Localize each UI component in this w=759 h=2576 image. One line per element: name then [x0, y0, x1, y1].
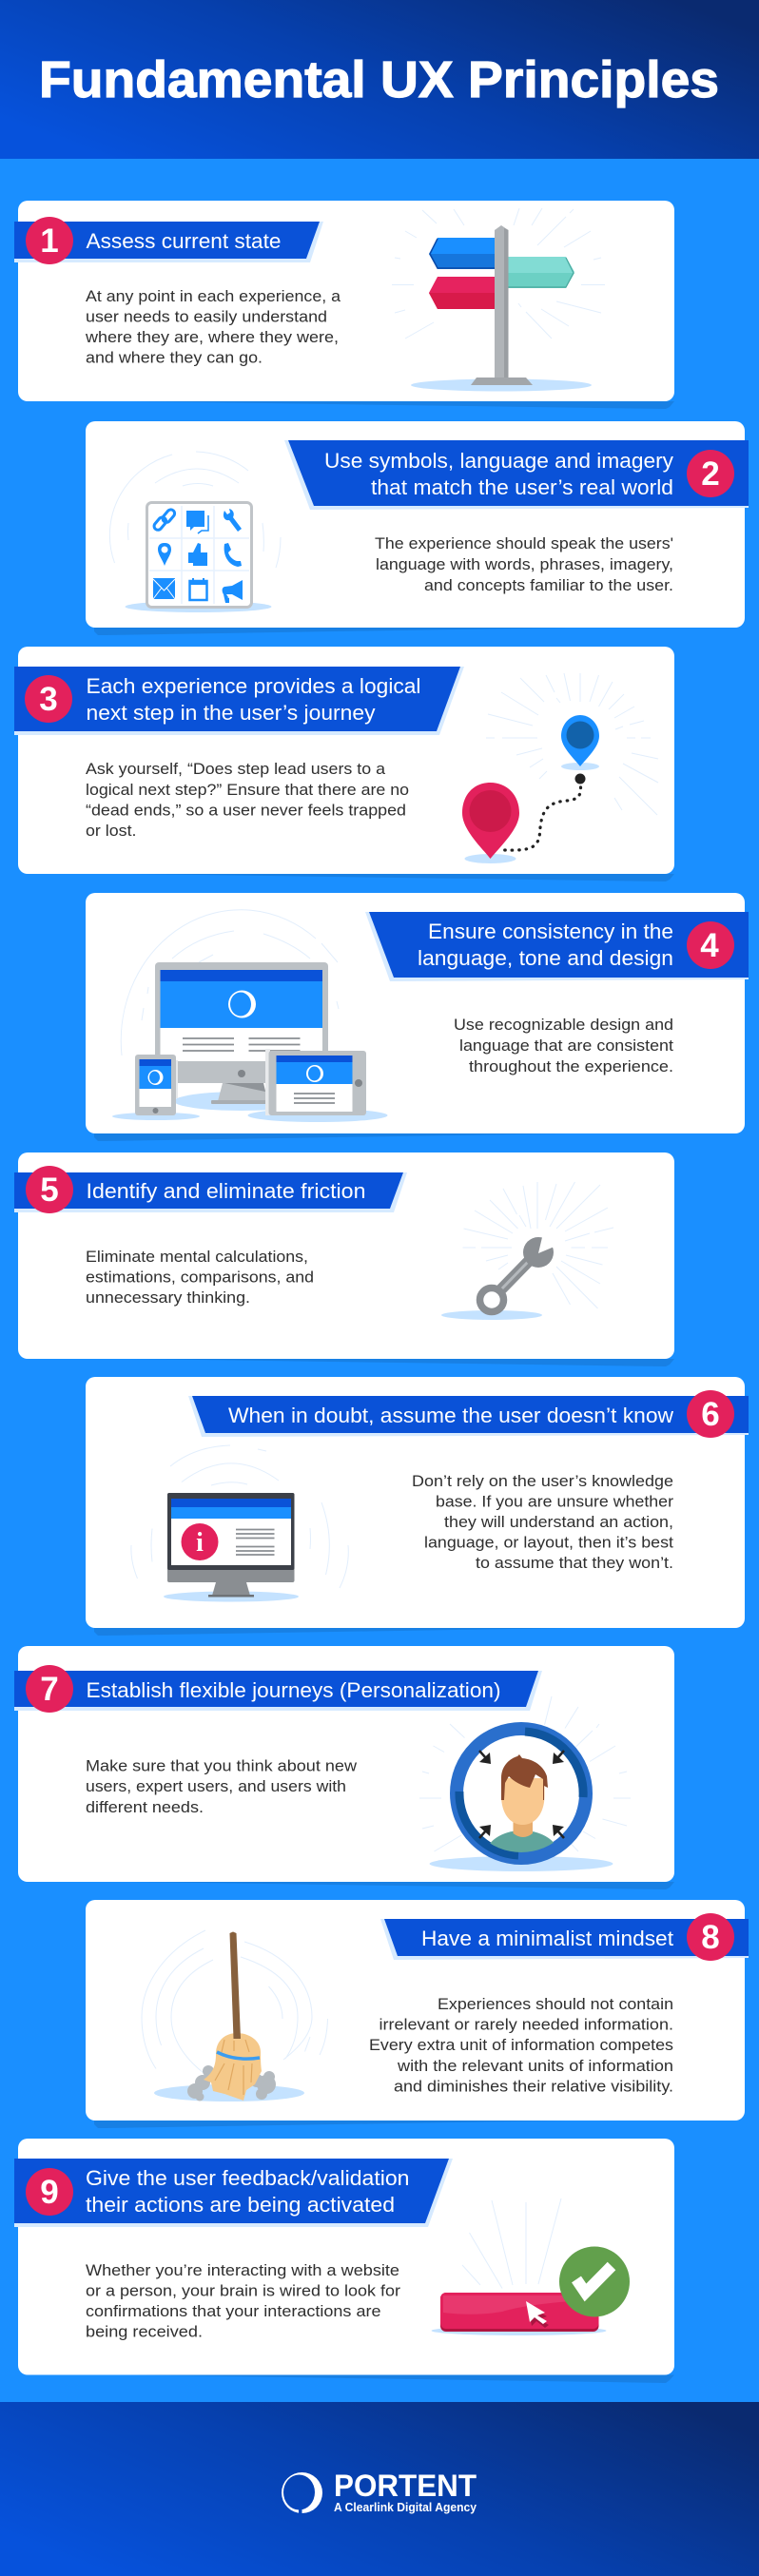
heading: feedback and validation: their actions are being activated	[86, 2193, 395, 2217]
icon: map pin	[158, 543, 171, 566]
number badge 4	[687, 921, 734, 969]
number badge 2: 2	[701, 455, 720, 493]
text: flexible journeys body: Make sure that you think about new	[86, 1757, 357, 1774]
text: feedback body: or a person, your brain is wired to look for	[86, 2282, 401, 2299]
text: assume the user body: to assume that they won’t.	[476, 1555, 673, 1572]
icon: personalized user	[419, 1696, 631, 1882]
text: flexible journeys body	[86, 1757, 357, 1816]
icon: megaphone	[223, 580, 243, 603]
number badge 9	[26, 2168, 73, 2216]
text: minimalist body: Experiences should not contain	[438, 1996, 673, 2013]
banner: step 7	[14, 1665, 542, 1713]
text: consistency body: Use recognizable design and	[454, 1017, 673, 1034]
text: logical next step body: Ask yourself, “Does step lead users to a	[86, 761, 386, 778]
green check badge	[559, 2246, 630, 2316]
heading: logical next step: Each experience provides a logical	[86, 674, 420, 698]
logo: Portent	[282, 2469, 477, 2515]
panel: 3 logical next step	[14, 647, 674, 881]
text: assess current state body: At any point in each experience, a	[86, 288, 341, 305]
logo tagline: A Clearlink Digital Agency	[334, 2501, 477, 2514]
text: assess current state body: user needs to easily understand	[86, 308, 327, 325]
panel: 1 assess current state	[14, 201, 674, 409]
logo wordmark: PORTENT	[334, 2469, 477, 2503]
icon: responsive devices	[112, 910, 388, 1122]
banner: step 2	[284, 440, 749, 510]
heading: consistency	[418, 920, 673, 970]
icon: signpost	[392, 208, 605, 392]
text: consistency body: throughout the experience.	[469, 1058, 673, 1075]
icon: envelope	[153, 578, 175, 599]
icon: symbol tablet	[109, 452, 281, 612]
text: symbols body: The experience should speak the users'	[375, 535, 673, 552]
text: minimalist body: irrelevant or rarely needed information.	[379, 2016, 673, 2033]
banner: step 6	[188, 1390, 749, 1438]
text: assume the user body: base. If you are unsure whether	[436, 1493, 674, 1510]
number badge 9: 9	[40, 2174, 59, 2211]
heading: consistency: Ensure consistency in the	[428, 920, 673, 943]
icon: spanner	[224, 509, 242, 532]
banner: step 4	[365, 912, 749, 981]
number badge 7	[26, 1665, 73, 1713]
number badge 8: 8	[701, 1919, 720, 1956]
text: eliminate friction body: unnecessary thinking.	[86, 1289, 250, 1307]
banner: step 5	[14, 1166, 407, 1213]
text: feedback body: being received.	[86, 2324, 203, 2341]
heading: assume the user doesn't know: When in doubt, assume the user doesn’t know	[228, 1404, 673, 1427]
text: assess current state body	[85, 288, 341, 367]
text: feedback body	[86, 2262, 401, 2341]
person	[491, 1754, 554, 1852]
panel: 9 feedback and validation	[14, 2139, 674, 2383]
heading: symbols: that match the user’s real world	[371, 475, 673, 499]
text: assess current state body: and where they can go.	[86, 350, 263, 367]
text: symbols body: and concepts familiar to the user.	[424, 577, 673, 594]
heading: flexible journeys: Establish flexible journeys (Personalization)	[86, 1678, 500, 1702]
heading: minimalist mindset: Have a minimalist mindset	[421, 1927, 673, 1950]
text: minimalist body: and diminishes their relative visibility.	[394, 2079, 673, 2096]
panel: 6 assume the user doesn't know	[86, 1377, 749, 1636]
heading: logical next step: next step in the user’s journey	[86, 701, 375, 725]
number badge 7: 7	[40, 1671, 59, 1708]
text: logical next step body: logical next step?” Ensure that there are no	[86, 782, 409, 799]
heading: symbols: Use symbols, language and imagery	[324, 449, 673, 473]
number badge 2	[687, 450, 734, 497]
panel: 2 symbols, language and imagery	[86, 421, 749, 635]
text: eliminate friction body: Eliminate mental calculations,	[86, 1249, 308, 1266]
footer band	[0, 2402, 759, 2576]
banner: step 8	[380, 1913, 749, 1961]
text: feedback body: confirmations that your interactions are	[86, 2303, 380, 2320]
logo ring	[282, 2472, 322, 2515]
number badge 5	[26, 1166, 73, 1213]
panel: 4 consistency	[86, 893, 749, 1141]
arrows pointing inward	[479, 1751, 564, 1838]
header band	[0, 0, 759, 159]
text: symbols body: language with words, phrases, imagery,	[376, 556, 673, 573]
icon: phone	[224, 543, 242, 567]
cursor	[526, 2301, 549, 2328]
icon: map pins and route	[462, 673, 658, 863]
number badge 3	[25, 675, 72, 723]
number badge 5: 5	[40, 1172, 59, 1209]
icon: wrench	[441, 1182, 613, 1320]
text: feedback body: Whether you’re interacting with a website	[86, 2262, 399, 2279]
panel: 5 eliminate friction	[14, 1152, 674, 1366]
text: consistency body	[454, 1017, 673, 1075]
icon: broom	[142, 1930, 327, 2101]
text: minimalist body	[369, 1996, 673, 2096]
text: eliminate friction body: estimations, comparisons, and	[86, 1269, 314, 1286]
number badge 4: 4	[700, 927, 719, 964]
heading: eliminate friction: Identify and eliminate friction	[86, 1179, 365, 1203]
number badge 1	[26, 217, 73, 264]
text: flexible journeys body: different needs.	[86, 1799, 204, 1816]
text: logical next step body: “dead ends,” so a user never feels trapped	[86, 803, 406, 820]
heading: logical next step	[86, 674, 420, 725]
banner: step 9	[14, 2159, 453, 2227]
heading: feedback and validation	[86, 2166, 410, 2217]
heading: consistency: language, tone and design	[418, 946, 673, 970]
icon: calendar	[189, 578, 207, 600]
number badge 6	[687, 1390, 734, 1438]
text: minimalist body: Every extra unit of information competes	[369, 2037, 673, 2054]
icon: info monitor: i	[196, 1528, 204, 1558]
banner: step 3	[14, 667, 464, 735]
phone	[135, 1055, 178, 1115]
text: logical next step body: or lost.	[86, 823, 137, 840]
number badge 1: 1	[40, 223, 59, 260]
text: symbols body	[375, 535, 673, 594]
icon: speech bubbles	[186, 511, 208, 533]
desktop monitor	[155, 962, 328, 1104]
heading: assess current state: Assess current state	[86, 229, 282, 253]
banner: step 1	[14, 217, 323, 264]
heading: feedback and validation: Give the user feedback/validation	[86, 2166, 410, 2190]
text: eliminate friction body	[86, 1249, 314, 1307]
icon: thumbs up	[188, 543, 207, 566]
number badge 8	[687, 1913, 734, 1961]
title: Fundamental UX Principles	[39, 51, 719, 108]
icon: info monitor	[131, 1445, 348, 1601]
text: flexible journeys body: users, expert users, and users with	[86, 1778, 346, 1795]
text: assume the user body: language, or layout, then it’s best	[424, 1535, 673, 1552]
text: assume the user body: Don’t rely on the user’s knowledge	[412, 1473, 673, 1490]
number badge 3: 3	[39, 681, 58, 718]
text: minimalist body: with the relevant units of information	[397, 2058, 673, 2075]
text: assume the user body	[412, 1473, 674, 1572]
heading: symbols	[324, 449, 673, 499]
text: assess current state body: where they are, where they were,	[85, 329, 339, 346]
tablet	[265, 1049, 366, 1115]
number badge 6: 6	[701, 1396, 720, 1433]
text: assume the user body: they will understand an action,	[444, 1514, 673, 1531]
panel: 7 flexible journeys	[14, 1646, 674, 1889]
icon: link	[152, 508, 176, 532]
text: logical next step body	[86, 761, 409, 840]
panel: 8 minimalist mindset	[86, 1900, 749, 2128]
text: consistency body: language that are consistent	[459, 1037, 673, 1055]
icon: button with confirmation check	[432, 2198, 630, 2335]
dust	[187, 2065, 276, 2101]
